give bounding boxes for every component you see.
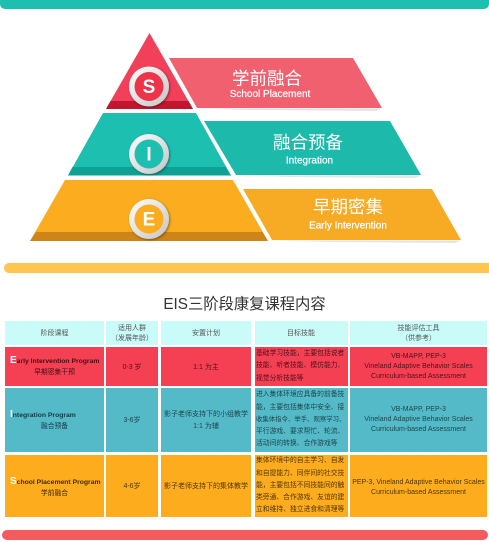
row S: tools: Curriculum-based Assessment [371,488,466,496]
row E: placement [161,347,251,386]
header: age: （发展年龄） [111,334,153,342]
row E: program: 早期密集干预 [34,369,75,376]
icon: E badge: E [143,210,155,230]
row S: program: 学前融合 [41,490,68,496]
row S: placement: 影子老师支持下的集体教学 [164,483,248,490]
banner: integration: Integration [286,156,333,166]
row E: tools: VB-MAPP, PEP-3 [391,353,446,360]
row S: age: 4-6岁 [123,483,141,490]
row I: tools [350,388,487,452]
banner: early intervention: Early Intervention [309,220,387,232]
row I: tools: Vineland Adaptive Behavior Scales [364,416,473,423]
row I: skills: 能，主要包括集体中安全、接 [256,404,344,411]
header: stage [5,321,104,345]
header: tools: （供参考） [401,334,436,342]
row S: skills: 类旁通、合作游戏、友谊的建 [256,494,344,501]
icon: S badge: S [143,77,155,98]
icon: I badge [129,134,169,174]
row E: skills: 视觉分析技能等 [256,375,304,382]
header: skills: 目标技能 [287,330,315,337]
row E: age [106,347,158,386]
row S: skills: 集体环境中的自主学习、自发 [256,457,344,464]
row S: program [5,455,104,517]
row I: skills: 平行游戏、要求帮忙、轮流、 [256,428,344,435]
pyramid diagram [30,33,461,243]
header: stage: 阶段课程 [40,330,68,337]
row E: tools [350,347,487,386]
row I: age: 3-6岁 [123,417,141,424]
row S: skills: 能，主要包括不同技能间的触 [256,482,344,489]
row S: skills [254,455,348,517]
row I: placement: 影子老师支持下的小组教学 [164,410,248,418]
pyramid tier: E [30,180,268,241]
row E: tools: Curriculum-based Assessment [371,373,466,380]
row I: tools: Curriculum-based Assessment [371,426,466,433]
banner: school placement [169,58,382,111]
banner: school placement: 学前融合 [232,68,302,88]
row E: age: 0-3 岁 [122,364,142,370]
pyramid tier: S [106,33,193,109]
pyramid tier: I [68,113,231,176]
header: tools [350,321,487,345]
banner: integration [204,121,421,178]
icon: E badge [129,199,169,239]
row I: placement: 1:1 为辅 [193,422,219,430]
header: placement [161,321,251,345]
row S: age [106,455,158,517]
row I: placement [161,388,251,452]
row I: tools: VB-MAPP, PEP-3 [391,406,446,413]
icon: I badge: I [146,144,152,166]
row E: skills [254,347,348,386]
row I: skills: 收集体指令、举手、观察学习、 [256,416,345,423]
header: age: 适用人群 [118,325,146,332]
row I: program: 融合预备 [41,422,68,430]
table [5,321,487,517]
row S: skills: 和自提能力、同伴间的社交技 [256,470,344,477]
banner: school placement: School Placement [230,89,311,100]
row E: tools: Vineland Adaptive Behavior Scales [364,363,473,370]
row S: tools [350,455,487,517]
row S: tools: PEP-3, Vineland Adaptive Behavior Scales [352,478,485,486]
row I: program [5,388,104,452]
row E: program [5,347,104,386]
yellow divider bar [4,263,489,273]
banner: early intervention [243,189,461,243]
header: placement: 安置计划 [192,330,220,337]
row E: placement: 1:1 为主 [193,364,219,370]
header: tools: 技能评估工具 [398,325,440,332]
row I: age [106,388,158,452]
row I: skills [254,388,348,452]
row E: skills: 技能、听者技能、模仿能力、 [256,362,344,369]
row I: skills: 活动间的转换、合作游戏等 [256,440,338,447]
row S: placement [161,455,251,517]
bottom red bar [2,530,488,540]
icon: S badge [129,66,169,106]
row I: program: Integration Program [10,408,76,420]
row E: skills: 基础学习技能，主要包括说者 [256,350,344,357]
top teal bar [0,0,489,9]
header: age [106,321,158,345]
row S: skills: 立和维持、独立进食和清理等 [256,506,344,513]
title: EIS三阶段康复课程内容 [163,296,326,313]
row I: skills: 进入集体环境应具备的前备技 [256,391,344,398]
header: skills [254,321,348,345]
banner: early intervention: 早期密集 [313,197,383,217]
banner: integration: 融合预备 [273,132,343,152]
row S: program: School Placement Program [10,476,101,486]
row E: program: Early Intervention Program [10,355,99,366]
